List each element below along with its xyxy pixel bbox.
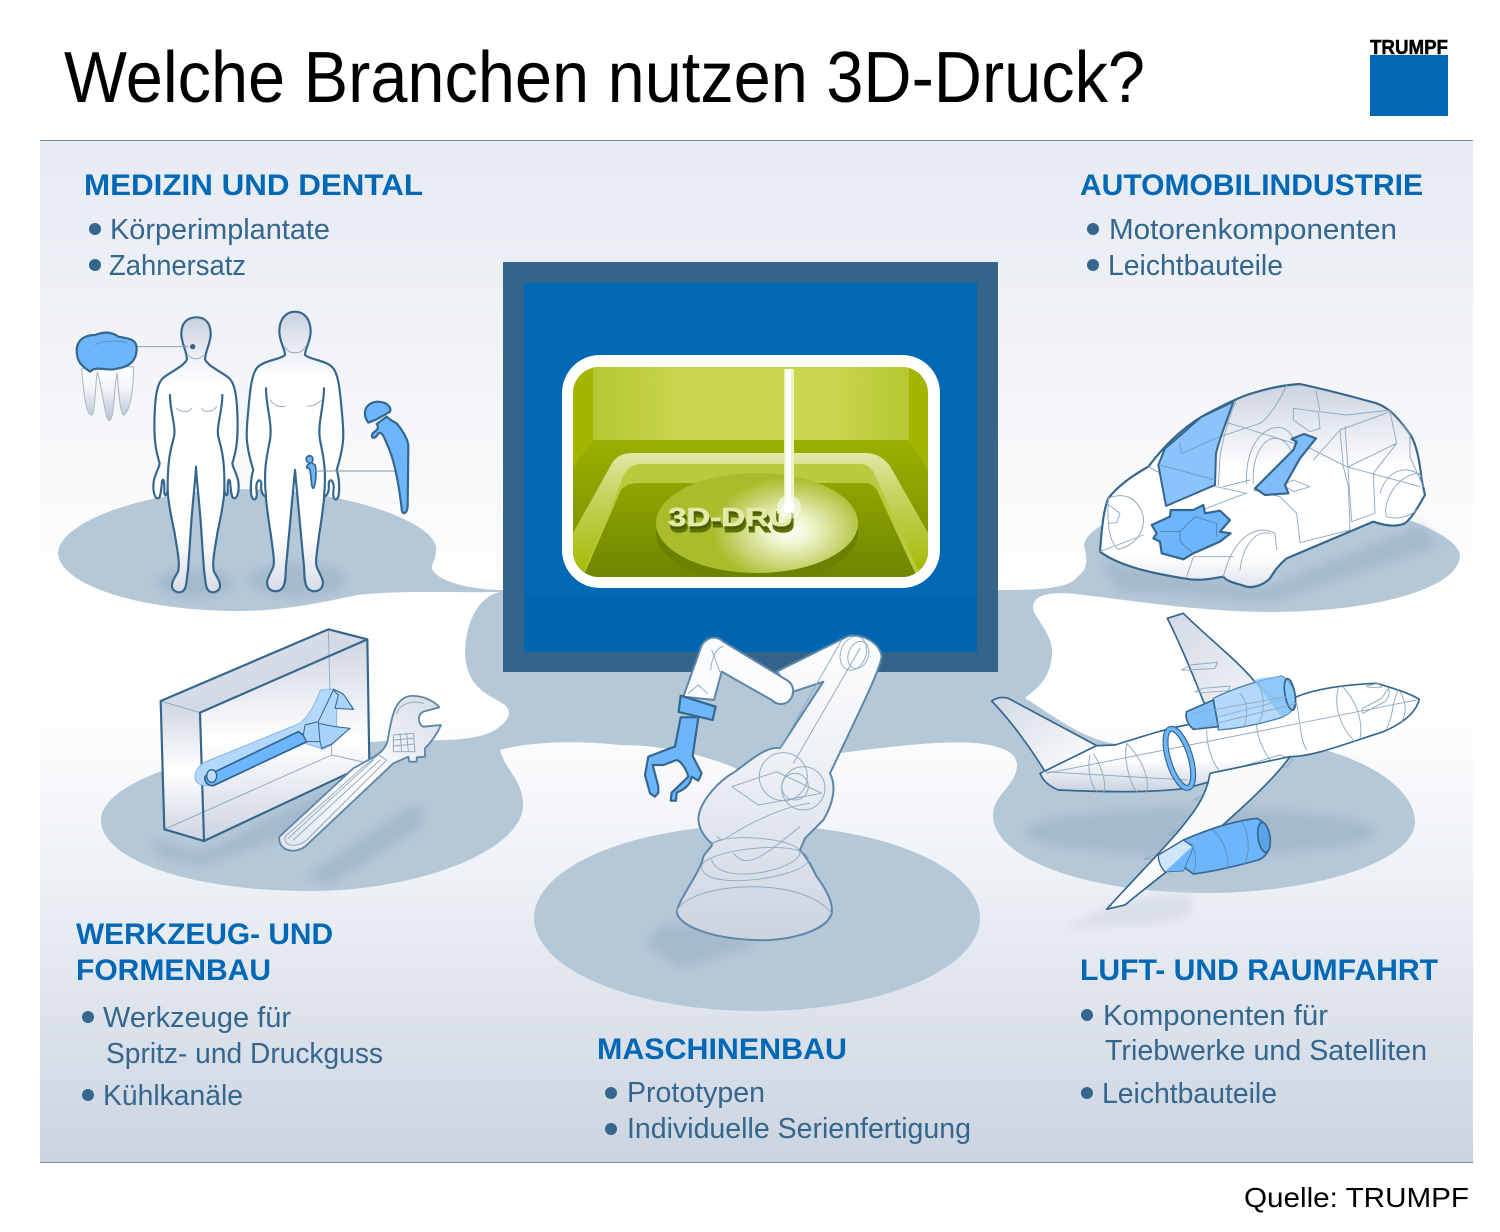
panel: tools and moulds text: Werkzeuge für (103, 1002, 291, 1034)
panel: medicine text: Körperimplantate (110, 214, 330, 246)
lower wing (1107, 757, 1290, 909)
logo: TRUMPF (1370, 37, 1448, 116)
title: Welche Branchen nutzen 3D-Druck? (64, 38, 1145, 118)
panel: aerospace text: Komponenten für (1103, 1000, 1328, 1032)
panel: automotive text (1080, 169, 1423, 282)
panel: tools and moulds text: FORMENBAU (76, 954, 271, 987)
panel: tools and moulds text: Spritz- und Druckguss (106, 1038, 383, 1070)
panel: tools and moulds text (76, 918, 383, 1112)
panel: machine building text (597, 1033, 971, 1145)
tools illustration (161, 629, 441, 851)
3D-DRU label on disk: 3D-DRU (669, 505, 794, 535)
3D-DRU label on disk (668, 502, 795, 538)
panel: automotive text: Motorenkomponenten (1109, 214, 1397, 246)
3D-DRU label on disk: 3D-DRU (670, 508, 795, 538)
lower engine (1158, 818, 1272, 874)
panel: aerospace text (1080, 954, 1438, 1110)
pale shadow below plane (1063, 895, 1193, 930)
panel: aerospace text: Leichtbauteile (1102, 1078, 1277, 1110)
panel: aerospace text: Triebwerke und Satelliten (1105, 1035, 1427, 1067)
car wireframe (1100, 385, 1423, 577)
icon: hip implant (365, 402, 408, 513)
fuselage ring highlight (1160, 726, 1199, 791)
panel: machine building text: Prototypen (627, 1077, 765, 1109)
laser beam (777, 369, 801, 519)
car body (1100, 384, 1425, 587)
3D printer chamber (562, 355, 940, 588)
robot gripper (645, 696, 716, 801)
medicine illustration (77, 312, 408, 592)
shadows on floor (150, 525, 1440, 968)
plane upper wing (1167, 613, 1300, 743)
panel: medicine text: Zahnersatz (109, 250, 246, 282)
robot body (677, 636, 882, 940)
connected floor shape (58, 489, 1460, 893)
icon: tooth implant (77, 333, 137, 421)
robot illustration (645, 633, 882, 940)
icon: man figure (247, 312, 399, 591)
robot wireframe (677, 640, 860, 913)
panel: automotive text: Leichtbauteile (1108, 250, 1283, 282)
source credit: Quelle: TRUMPF (1244, 1182, 1469, 1213)
central machine window (503, 262, 998, 672)
plane illustration (992, 613, 1419, 909)
panel: aerospace text: LUFT- UND RAUMFAHRT (1080, 954, 1438, 987)
mould block (161, 629, 369, 841)
panel: machine building text: Individuelle Serienfertigung (627, 1113, 971, 1145)
engine highlight (1152, 505, 1231, 559)
panel: tools and moulds text: WERKZEUG- UND (76, 918, 333, 951)
windshield highlight (1158, 402, 1233, 506)
panel: background (40, 140, 1473, 1162)
blue wrench inside mould (195, 689, 354, 786)
car illustration (1100, 384, 1425, 587)
plane tail (992, 697, 1097, 772)
floor: machine building ellipse (534, 825, 980, 1011)
plane fuselage (1040, 683, 1419, 792)
3D-DRU label on disk: 3D-DRU (668, 502, 793, 532)
panel: tools and moulds text: Kühlkanäle (103, 1080, 243, 1112)
plane frame lines (1043, 662, 1417, 859)
icon: woman figure (138, 317, 239, 592)
pillar highlight (1255, 434, 1316, 495)
panel: medicine text (84, 169, 423, 282)
panel: medicine text: MEDIZIN UND DENTAL (84, 169, 423, 202)
loose wrench (279, 696, 441, 851)
panel: machine building text: MASCHINENBAU (597, 1033, 847, 1066)
robot forearm (683, 638, 793, 704)
logo: TRUMPF: TRUMPF (1370, 37, 1448, 59)
panel: automotive text: AUTOMOBILINDUSTRIE (1080, 169, 1423, 202)
upper engine (1186, 676, 1298, 730)
